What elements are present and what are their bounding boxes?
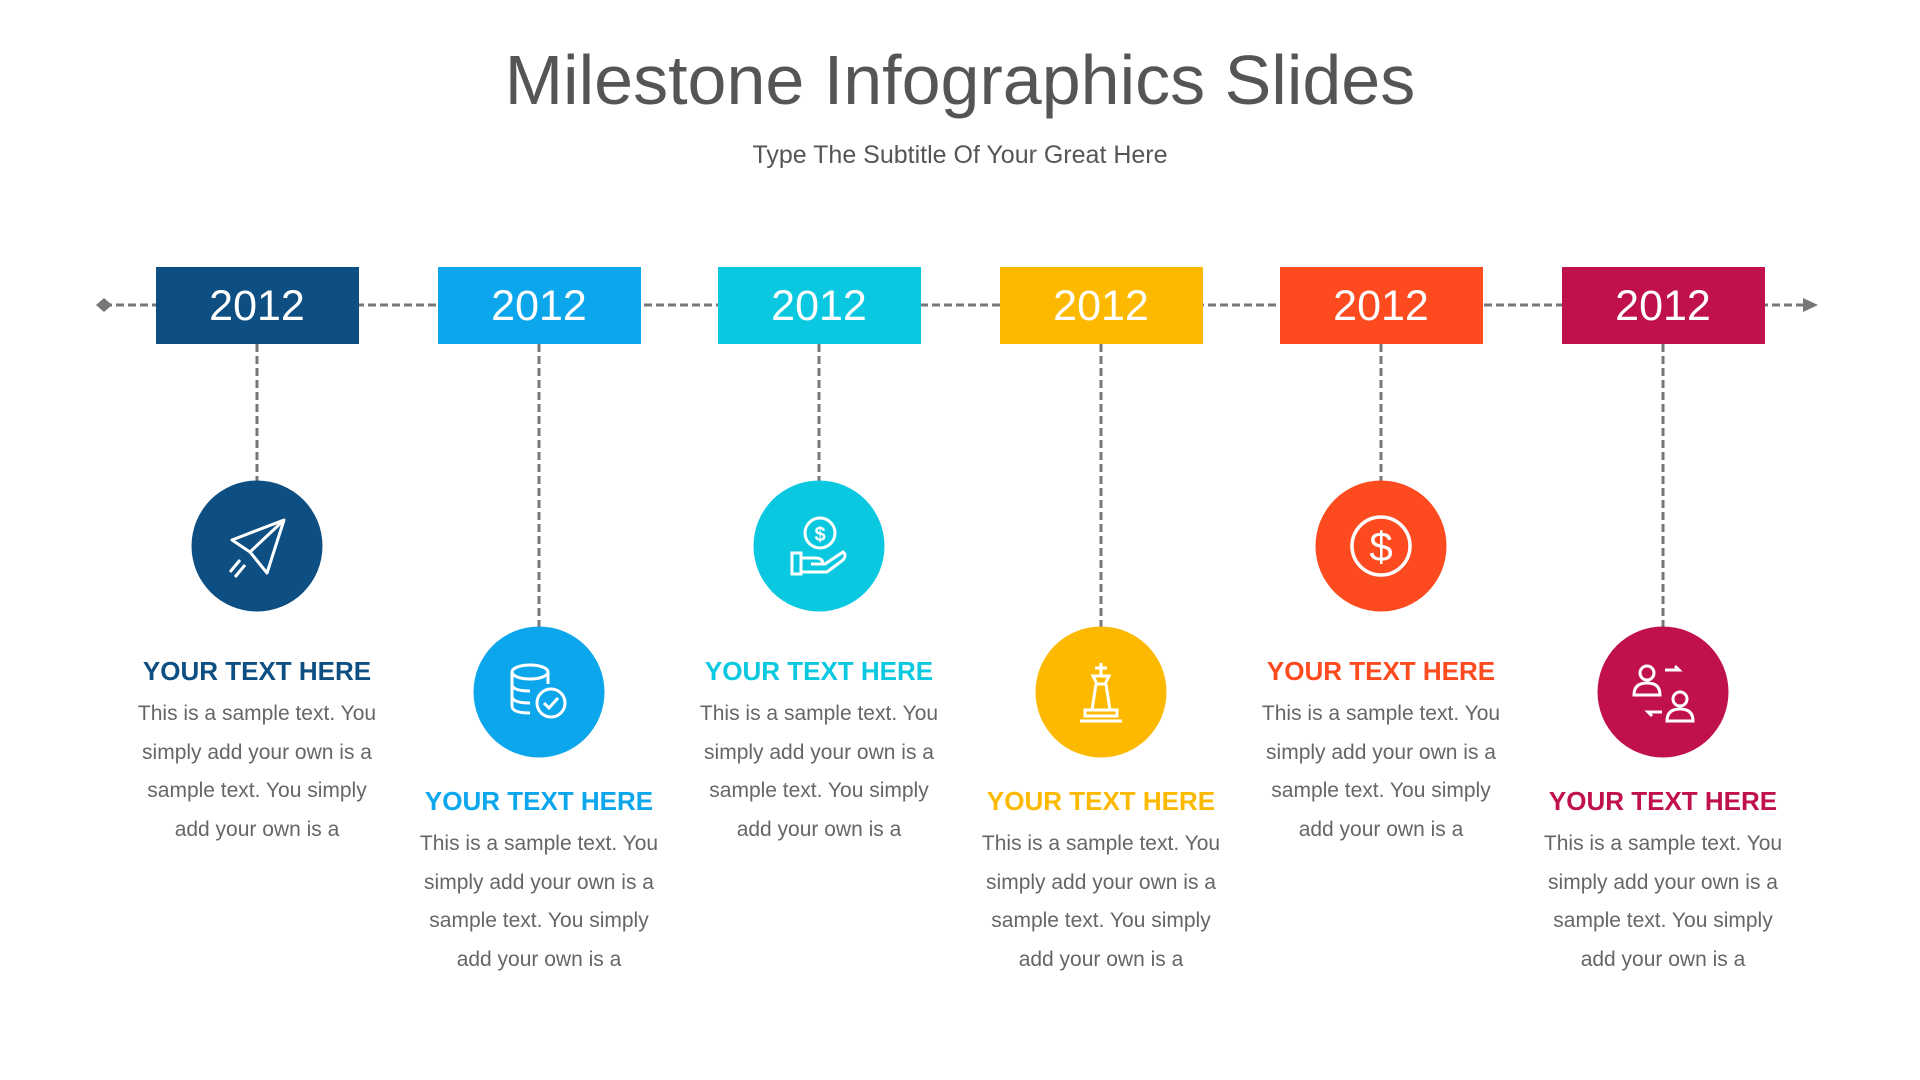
- icon circle: money hand: $: [814, 524, 826, 546]
- year boxes: 2012: [491, 282, 587, 330]
- timeline dashed line: [96, 298, 1818, 312]
- icon circle: users exchange: [1598, 626, 1728, 758]
- year boxes: 2012: [771, 282, 867, 330]
- text block 6: YOUR TEXT HERE: [1549, 786, 1777, 816]
- subtitle: Type The Subtitle Of Your Great Here: [752, 141, 1168, 169]
- text block 2: This is a sample text. You simply add your own is a sample text. You simply add your own is a: [420, 832, 658, 970]
- connectors: [257, 344, 1663, 627]
- text block 3: This is a sample text. You simply add your own is a sample text. You simply add your own is a: [700, 702, 938, 840]
- text block 6: This is a sample text. You simply add your own is a sample text. You simply add your own is a: [1544, 832, 1782, 970]
- icon circle: dollar coin: [1316, 480, 1446, 612]
- icon circle: paper plane: [192, 480, 322, 612]
- text block 4: YOUR TEXT HERE: [987, 786, 1215, 816]
- text block 1: YOUR TEXT HERE: [143, 656, 371, 686]
- year boxes: 2012: [1615, 282, 1711, 330]
- icon circle: money hand: [754, 480, 884, 612]
- text block 1: This is a sample text. You simply add your own is a sample text. You simply add your own is a: [138, 702, 376, 840]
- year boxes: 2012: [1333, 282, 1429, 330]
- text block 5: YOUR TEXT HERE: [1267, 656, 1495, 686]
- text block 5: This is a sample text. You simply add your own is a sample text. You simply add your own is a: [1262, 702, 1500, 840]
- year boxes: [156, 267, 1765, 344]
- icon circle: dollar coin: $: [1369, 523, 1393, 570]
- text block 4: This is a sample text. You simply add your own is a sample text. You simply add your own is a: [982, 832, 1220, 970]
- icon circle: database check: [474, 626, 604, 758]
- icon circle: chess king: [1036, 626, 1166, 758]
- title: Milestone Infographics Slides: [505, 41, 1415, 119]
- text block 3: YOUR TEXT HERE: [705, 656, 933, 686]
- year boxes: 2012: [1053, 282, 1149, 330]
- year boxes: 2012: [209, 282, 305, 330]
- text block 2: YOUR TEXT HERE: [425, 786, 653, 816]
